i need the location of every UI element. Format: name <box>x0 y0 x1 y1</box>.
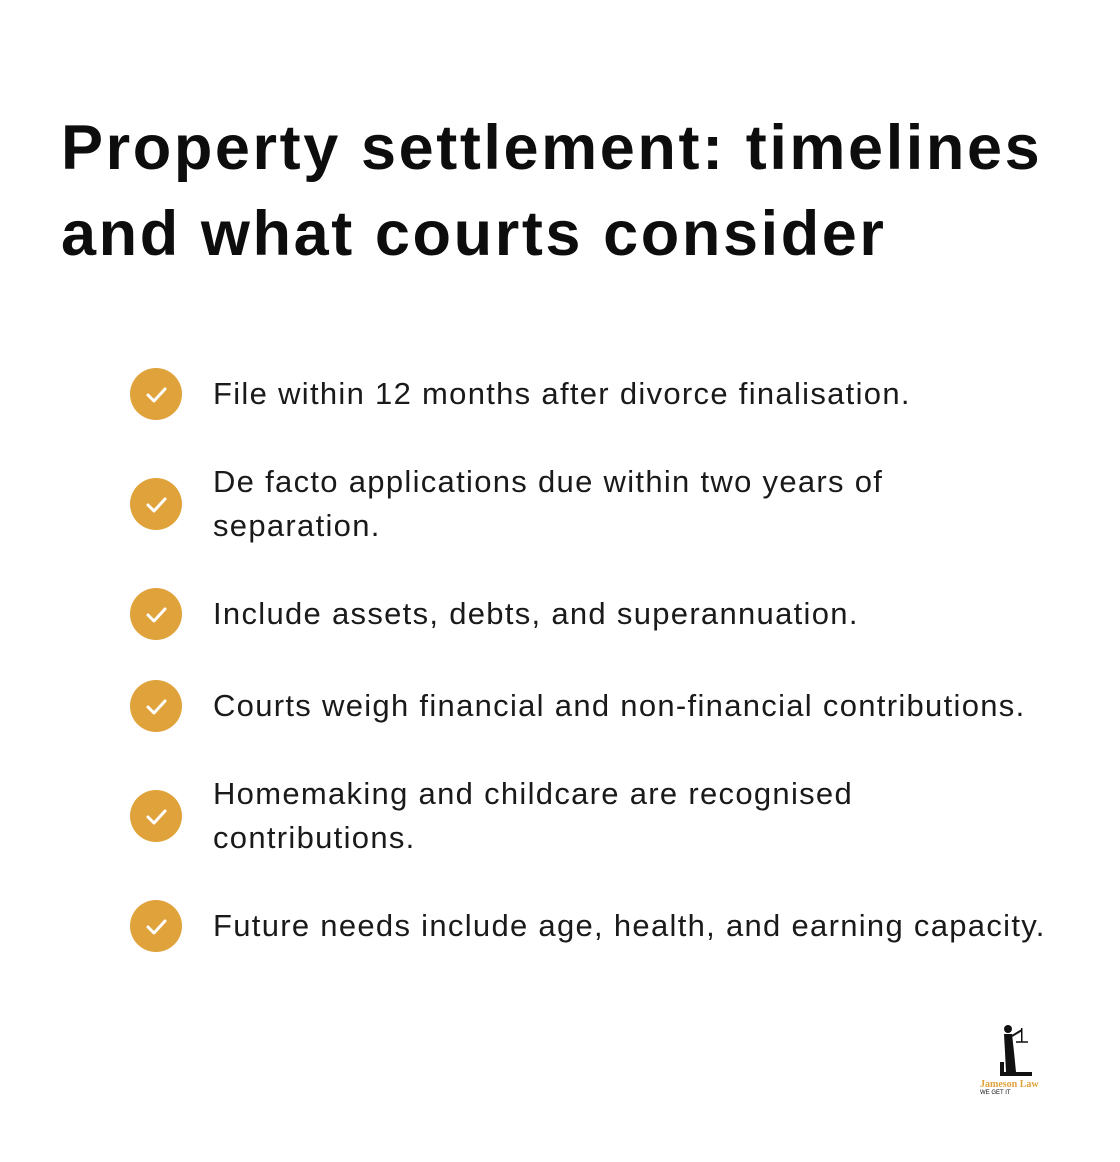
text <box>213 776 853 855</box>
text: separation. <box>213 508 381 543</box>
item 3 <box>130 588 859 640</box>
logo <box>980 1025 1039 1096</box>
title: Property settlement: timelines <box>61 113 1042 183</box>
title <box>61 113 1042 269</box>
icon: check <box>130 680 182 732</box>
logo: WE GET IT <box>980 1090 1011 1096</box>
item 6 <box>130 900 1046 952</box>
text: File within 12 months after divorce finalisation. <box>213 376 911 411</box>
item 5 <box>130 776 853 855</box>
text: Courts weigh financial and non-financial contributions. <box>213 688 1026 723</box>
text: De facto applications due within two years of <box>213 464 883 499</box>
title: and what courts consider <box>61 199 887 269</box>
text: Include assets, debts, and superannuation. <box>213 596 859 631</box>
item 4 <box>130 680 1026 732</box>
text: contributions. <box>213 820 416 855</box>
text <box>213 464 883 543</box>
icon: check <box>130 588 182 640</box>
text: Future needs include age, health, and earning capacity. <box>213 908 1046 943</box>
icon: check <box>130 478 182 530</box>
icon: check <box>130 900 182 952</box>
item 1 <box>130 368 911 420</box>
item 2 <box>130 464 883 543</box>
icon: lady justice <box>1000 1025 1032 1076</box>
icon: check <box>130 368 182 420</box>
text: Homemaking and childcare are recognised <box>213 776 853 811</box>
icon: check <box>130 790 182 842</box>
brand text: Jameson Law <box>980 1079 1039 1090</box>
